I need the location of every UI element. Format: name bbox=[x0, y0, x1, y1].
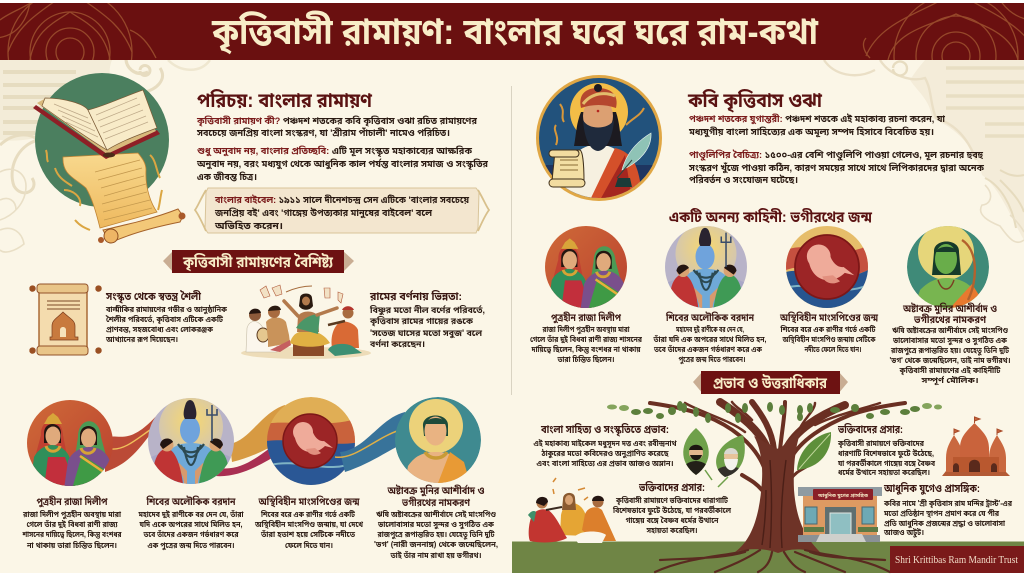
text block: কৃত্তিবাসী রামায়ণে ভক্তিবাদের bbox=[837, 439, 924, 449]
text block: সহায়তা করেছিল। bbox=[646, 526, 698, 535]
text block bbox=[530, 325, 642, 364]
text block: not only translation: এক জীবন্ত চিত্র। bbox=[197, 171, 257, 183]
text block: দায়িত্বে ছিলেন, কিন্তু বংশধর না থাকায় bbox=[531, 345, 641, 354]
text block bbox=[138, 510, 244, 551]
text block: ফেলে দিতে যান। bbox=[285, 541, 333, 550]
spread of devotion, left bbox=[528, 478, 732, 543]
text block: গেলে তাঁর দুই বিধবা রাণী রাজ্য bbox=[26, 520, 118, 529]
text block: ঠাকুরের মতো কবিদেরও অনুপ্রাণিত করেছে bbox=[541, 448, 669, 459]
text block: শাসনের দায়িত্বে ছিলেন, কিন্তু বংশধর bbox=[22, 530, 122, 539]
callout: bible of bengal: জনপ্রিয় বই' এবং 'গাঙ্গেয় উপত্যকার মানুষের বাইবেল' বলে bbox=[214, 207, 433, 219]
heading: কবি কৃত্তিবাস ওঝা bbox=[687, 88, 822, 113]
heading: পুত্রহীন রাজা দিলীপ bbox=[551, 311, 621, 324]
icon: musicians and singer bbox=[241, 285, 371, 359]
text block bbox=[534, 439, 677, 468]
text block: 'ভগ' থেকে জন্মেছিলেন, তাই নাম ভগীরথ। bbox=[890, 356, 1010, 365]
text block: এক পুত্রের জন্ম দিতে পারবেন। bbox=[148, 541, 234, 551]
text block: শৈলীর পরিবর্তে, কৃত্তিবাস এটিকে একটি bbox=[105, 314, 223, 325]
text block: 'ভগ' (নারী জননাঙ্গ) থেকে জন্মেছিলেন, bbox=[374, 540, 498, 549]
unique story step 3 bbox=[779, 226, 878, 354]
text block: শিবের বরে এক রাণীর গর্ভে একটি bbox=[260, 509, 355, 519]
text block: what is it: কৃত্তিবাসী রামায়ণ কী? পঞ্চদশ শতকের কবি কৃত্তিবাস ওঝা রচিত রামায়ণের bbox=[196, 115, 477, 127]
icon: green Rama with bow bbox=[907, 224, 989, 308]
text block: not only translation bbox=[196, 145, 488, 183]
text block: বিষ্ণুর মতো নীল বর্ণের পরিবর্তে, bbox=[369, 304, 485, 316]
text block: পুত্রের জন্ম দিতে পারবেন। bbox=[678, 355, 746, 365]
text block: ঋষি অষ্টাবক্রের আশীর্বাদে সেই মাংসপিণ্ড bbox=[892, 325, 1008, 335]
text block: কৃত্তিবাসী রামায়ণের এই কাহিনীটি bbox=[899, 365, 1001, 376]
icon: open book with scroll bbox=[33, 73, 186, 243]
center divider bbox=[510, 86, 512, 395]
heading: রামের বর্ণনায় ভিন্নতা: bbox=[369, 289, 462, 303]
text block: যদি একে অপরের সাথে মিলিত হন, bbox=[139, 520, 242, 529]
text block bbox=[653, 325, 766, 365]
text block bbox=[22, 510, 122, 550]
text block: গেলে তাঁর দুই বিধবা রাণী রাজ্য শাসনের bbox=[530, 335, 642, 344]
icon: young prince bbox=[395, 397, 481, 483]
icon: institute building bbox=[798, 487, 882, 542]
text block: manuscripts: সংস্করণ খুঁজে পাওয়া কঠিন, কারণ সময়ের সাথে সাথে লিপিকারদের দ্বারা অনেক bbox=[688, 162, 984, 174]
icon: fetus in red circle bbox=[283, 414, 337, 468]
text block: রাজপুত্রে রূপান্তরিত হয়। যেহেতু তিনি দুটি bbox=[377, 529, 495, 540]
story strip step 2: boon of Shiva bbox=[138, 395, 244, 551]
text block: কৃত্তিবাসী রামায়ণে ভক্তিবাদের ধারাগাটি bbox=[615, 495, 728, 506]
text block bbox=[780, 324, 876, 354]
icon: two queens bbox=[545, 226, 628, 311]
text block bbox=[105, 304, 227, 344]
callout: bible of bengal: বাংলার বাইবেল: ১৯১১ সালে দীনেশচন্দ্র সেন এটিকে 'বাংলার সবচেয়ে bbox=[214, 194, 469, 206]
heading: অষ্টাবক্র মুনির আশীর্বাদ ও bbox=[902, 301, 997, 315]
banner: influence and legacy: প্রভাব ও উত্তরাধিকার bbox=[713, 374, 828, 392]
text block: manuscripts: পরিবর্তন ও সংযোজন ঘটেছে। bbox=[689, 174, 798, 186]
header ornament: left mandala bbox=[0, 3, 156, 60]
text block: নদীতে ফেলে দিতে যান। bbox=[804, 345, 862, 354]
text block: রাজা দিলীপ পুত্রহীন অবস্থায় মারা bbox=[542, 325, 630, 335]
text block: প্রাণবন্ত, সহজবোধ্য এবং লোকরঞ্জক bbox=[106, 325, 213, 334]
text block: not only translation: অনুবাদ নয়, বরং মধ্যযুগ থেকে আধুনিক কাল পর্যন্ত বাংলার সমাজ ও সংস্কৃতির bbox=[196, 158, 488, 170]
heading bbox=[387, 483, 484, 509]
text block: fifteenth century: মধ্যযুগীয় বাংলা সাহিত্যের এক অমূল্য সম্পদ হিসাবে বিবেচিত হয়। bbox=[688, 126, 934, 138]
feature: description of Rama bbox=[241, 285, 485, 359]
icon: singing devotees bbox=[528, 478, 616, 543]
story strip step 3: boneless mass bbox=[254, 414, 363, 550]
heading: পরিচয়: বাংলার রামায়ণ bbox=[197, 88, 373, 112]
text block: অস্থিবিহীন মাংসপিণ্ড জন্মায় সেটিকে bbox=[782, 334, 876, 344]
credit box bbox=[890, 546, 1024, 573]
text block: আখ্যানের রূপ দিয়েছেন। bbox=[105, 335, 178, 344]
text block: তবে তাঁদের একজন গর্ভধারণ করে এক bbox=[653, 344, 762, 354]
panel: poet krittibas bbox=[536, 75, 984, 201]
text block bbox=[374, 509, 498, 560]
text block: রাজা দিলীপ পুত্রহীন অবস্থায় মারা bbox=[22, 510, 122, 520]
panel: introduction bbox=[33, 73, 489, 243]
text block: 'সতেজ ঘাসের মতো সবুজ' বলে bbox=[370, 328, 482, 339]
heading: সংস্কৃত থেকে স্বতন্ত্র শৈলী bbox=[105, 290, 202, 304]
text block: fifteenth century: পঞ্চদশ শতকের যুগান্তরী: পঞ্চদশ শতকে এই মহাকাব্য রচনা করেন, যা bbox=[689, 113, 945, 125]
text block: মহাদেব দুই রাণীকে বর দেন যে, bbox=[675, 325, 744, 334]
text block: ঋষি অষ্টাবক্রের আশীর্বাদে সেই মাংসপিণ্ড bbox=[376, 509, 496, 519]
text block: আজও অটুট। bbox=[883, 528, 924, 538]
text block: তবে তাঁদের একজন গর্ভধারণ করে bbox=[143, 529, 239, 539]
icon: temple bbox=[942, 417, 1010, 476]
unique story step 2 bbox=[653, 223, 766, 365]
banner: features heading: কৃত্তিবাসী রামায়ণের বৈশিষ্ট্য bbox=[182, 253, 334, 272]
text block: ভালোবাসার মতো সুন্দর ও সুগঠিত এক bbox=[892, 336, 1007, 346]
spread of devotion, right bbox=[837, 417, 1010, 477]
header band bbox=[0, 3, 1024, 60]
icon: Shiva with queens bbox=[148, 395, 234, 484]
heading: পুত্রহীন রাজা দিলীপ bbox=[36, 495, 108, 508]
icon: scroll with temple bbox=[30, 284, 101, 355]
text block: রাজপুত্রে রূপান্তরিত হয়। যেহেতু তিনি দুটি bbox=[890, 345, 1009, 356]
text block: বর্ণনা করেছেন। bbox=[369, 338, 425, 349]
unique story step 1 bbox=[530, 226, 642, 364]
illustration: banyan tree bbox=[607, 401, 942, 572]
text block: শিবের বরে এক রাণীর গর্ভে একটি bbox=[780, 324, 876, 334]
text block: এই মহাকাব্য মাইকেল মধুসূদন দত্ত এবং রবীন্দ্রনাথ bbox=[534, 439, 677, 449]
heading: অস্থিবিহীন মাংসপিণ্ডের জন্ম bbox=[258, 495, 360, 508]
story strip step 1: childless king bbox=[22, 400, 122, 550]
heading: আধুনিক যুগেও প্রাসঙ্গিক: bbox=[883, 482, 980, 495]
ground strip bbox=[512, 542, 1024, 573]
banner: features heading bbox=[163, 250, 354, 273]
text block: what is it bbox=[196, 115, 477, 139]
icon: institute building: আধুনিক যুগের প্রাসঙ্গিক bbox=[817, 493, 869, 499]
text block bbox=[837, 439, 935, 477]
text block: ধর্মের উত্থানে সহায়তা করেছিল। bbox=[838, 467, 930, 477]
background decoration: right parchment and paisley bbox=[824, 60, 1024, 242]
text block bbox=[254, 509, 363, 550]
text block: প্রতি আধুনিক প্রজন্মের শ্রদ্ধা ও ভালোবাসা bbox=[884, 519, 1006, 529]
callout: bible of bengal bbox=[195, 188, 489, 233]
modern relevance bbox=[798, 482, 1012, 542]
icon: fetus on waves bbox=[786, 226, 868, 310]
feature: distinct style bbox=[30, 284, 227, 355]
text block: fifteenth century bbox=[688, 113, 945, 138]
callout: bible of bengal: অভিহিত করেন। bbox=[214, 220, 283, 232]
text block: এবং বাংলা সাহিত্যে এর প্রভাব আজও অম্লান। bbox=[536, 459, 674, 468]
text block: অস্থিবিহীন মাংসপিণ্ড জন্মায়, যা দেখে bbox=[254, 520, 363, 529]
heading: ভগীরথের নামকরণ bbox=[401, 496, 470, 509]
text block: বাল্মীকির রামায়ণের গভীর ও আনুষ্ঠানিক bbox=[105, 304, 227, 315]
text block: তারা চিন্তিত ছিলেন। bbox=[557, 355, 614, 364]
text block: গাঙ্গেয় বঙ্গে বৈষ্ণব ধর্মের উত্থানে bbox=[626, 515, 719, 525]
text block bbox=[883, 499, 1012, 538]
text block bbox=[890, 325, 1010, 386]
text block: তাঁরা যদি এক অপরের সাথে মিলিত হন, bbox=[653, 335, 766, 344]
text block: না থাকায় তারা চিন্তিত ছিলেন। bbox=[26, 541, 117, 550]
heading: অস্থিবিহীন মাংসপিণ্ডের জন্ম bbox=[779, 311, 878, 324]
icon: portraits on leaves bbox=[682, 428, 745, 487]
icon: portrait of poet bbox=[536, 75, 662, 201]
text block bbox=[612, 495, 732, 535]
heading: ভগীরথের নামকরণ bbox=[913, 313, 986, 326]
heading: শিবের অলৌকিক বরদান bbox=[146, 495, 236, 508]
text block: যা পরবর্তীকালে গাঙ্গেয় বঙ্গে বৈষ্ণব bbox=[837, 458, 935, 468]
text block: not only translation: শুধু অনুবাদ নয়, বাংলার প্রতিচ্ছবি: এটি মূল সংস্কৃত মহাকাব্যের আক্ষরিক bbox=[197, 145, 472, 157]
heading: ভক্তিবাদের প্রসার: bbox=[837, 423, 903, 436]
title: কৃত্তিবাসী রামায়ণ: বাংলার ঘরে ঘরে রাম-কথা bbox=[211, 11, 819, 55]
text block: তাই তাঁর নাম রাখা হয় ভগীরথ। bbox=[390, 551, 482, 560]
text block: what is it: সবচেয়ে জনপ্রিয় বাংলা সংস্করণ, যা 'শ্রীরাম পাঁচালী' নামেও পরিচিত। bbox=[196, 127, 450, 139]
heading: unique story: একটি অনন্য কাহিনী: ভগীরথের জন্ম bbox=[669, 207, 872, 226]
story strip step 4: blessing and naming bbox=[374, 397, 498, 560]
text block: ভালোবাসার মতো সুন্দর ও সুগঠিত এক bbox=[377, 520, 494, 530]
heading: শিবের অলৌকিক বরদান bbox=[665, 311, 754, 324]
text block: manuscripts: পাণ্ডুলিপির বৈচিত্র্য: ১৫০০-এর বেশি পাণ্ডুলিপি পাওয়া গেলেও, মূল রচনার হুবহু bbox=[689, 149, 983, 161]
text block: কৃত্তিবাস রামের গায়ের রঙকে bbox=[369, 315, 474, 327]
text block: manuscripts bbox=[688, 149, 984, 186]
icon: two queens bbox=[27, 400, 114, 489]
background decoration: left parchment and paisley bbox=[0, 60, 210, 252]
story strip: wave ribbons bbox=[105, 397, 412, 490]
heading: ভক্তিবাদের প্রসার: bbox=[638, 481, 705, 494]
header ornament: right mandala bbox=[862, 3, 1024, 60]
text block: ধারণাটি বিশেষভাবে ফুটে উঠেছে, bbox=[838, 448, 934, 459]
text block: সম্পূর্ণ মৌলিক। bbox=[920, 375, 978, 386]
influence on literature bbox=[534, 423, 745, 487]
heading: অষ্টাবক্র মুনির আশীর্বাদ ও bbox=[387, 483, 484, 497]
text block: মতো প্রতিষ্ঠান স্থাপন প্রমাণ করে যে পীর bbox=[883, 508, 999, 518]
heading bbox=[902, 301, 997, 326]
text block: তাঁরা হতাশ হয়ে সেটিকে নদীতে bbox=[260, 529, 355, 539]
icon: large leaf bbox=[797, 432, 831, 470]
heading: বাংলা সাহিত্য ও সংস্কৃতিতে প্রভাব: bbox=[540, 423, 669, 437]
icon: Shiva with queens bbox=[665, 223, 747, 308]
banner: influence and legacy bbox=[693, 371, 848, 394]
text block bbox=[369, 304, 485, 349]
text block: মহাদেব দুই রাণীকে বর দেন যে, তাঁরা bbox=[138, 510, 244, 519]
text block: বিশেষভাবে ফুটে উঠেছে, যা পরবর্তীকালে bbox=[612, 505, 732, 516]
unique story step 4 bbox=[890, 224, 1010, 386]
